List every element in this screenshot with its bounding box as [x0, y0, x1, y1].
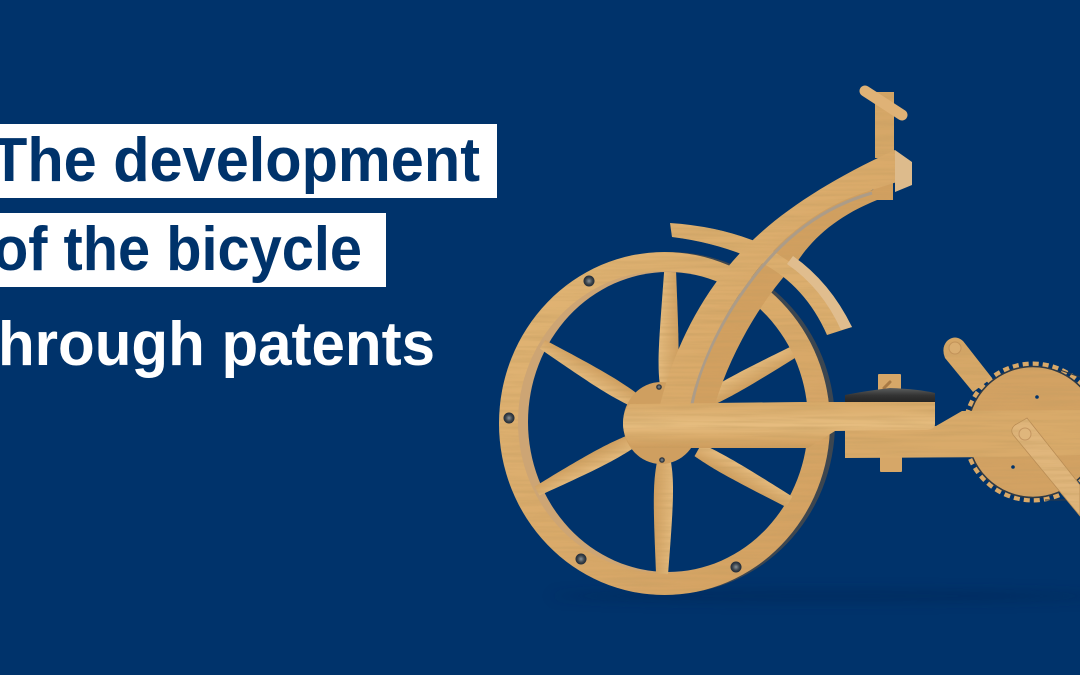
lower peg	[880, 456, 902, 472]
main arm shadow edge	[692, 193, 872, 404]
wheel tyre	[505, 252, 835, 594]
title	[0, 124, 497, 379]
lower crank pivot	[1019, 428, 1031, 440]
lower frame pegs	[878, 374, 902, 472]
mudguard end bevel	[787, 256, 852, 330]
handlebar crossbar	[865, 91, 902, 115]
rear assembly: crank and gear	[943, 338, 1080, 497]
gear disc	[968, 367, 1080, 497]
title line 2: of the bicycle	[0, 215, 362, 284]
mudguard	[670, 223, 852, 335]
wheel rivets	[504, 276, 742, 572]
upper crank arm	[943, 338, 992, 392]
wheel hub	[623, 382, 699, 464]
wheel rim	[499, 252, 830, 595]
upper crank pivot	[949, 342, 961, 354]
peg pin	[884, 382, 890, 388]
rim inner bevel	[518, 271, 808, 573]
title line 1: The development	[0, 126, 480, 195]
ground shadow	[550, 590, 1080, 602]
rear frame beam	[845, 410, 1080, 458]
rear fork arc	[690, 165, 893, 404]
upper peg	[878, 374, 901, 392]
wheel spokes	[533, 272, 797, 574]
title highlight bar: line 2	[0, 213, 386, 287]
black cap	[845, 388, 935, 403]
main horizontal beam	[623, 402, 935, 448]
wheel opening	[528, 272, 808, 572]
gear pins	[1011, 395, 1039, 469]
main curved arm	[660, 150, 897, 405]
head block	[895, 150, 912, 192]
small joint block	[758, 272, 779, 289]
wooden bicycle	[499, 91, 1080, 595]
title highlight bar: line 1	[0, 124, 497, 198]
lower crank arm	[1012, 418, 1080, 516]
gear teeth and chain	[965, 364, 1080, 500]
handlebar stem	[875, 92, 894, 158]
